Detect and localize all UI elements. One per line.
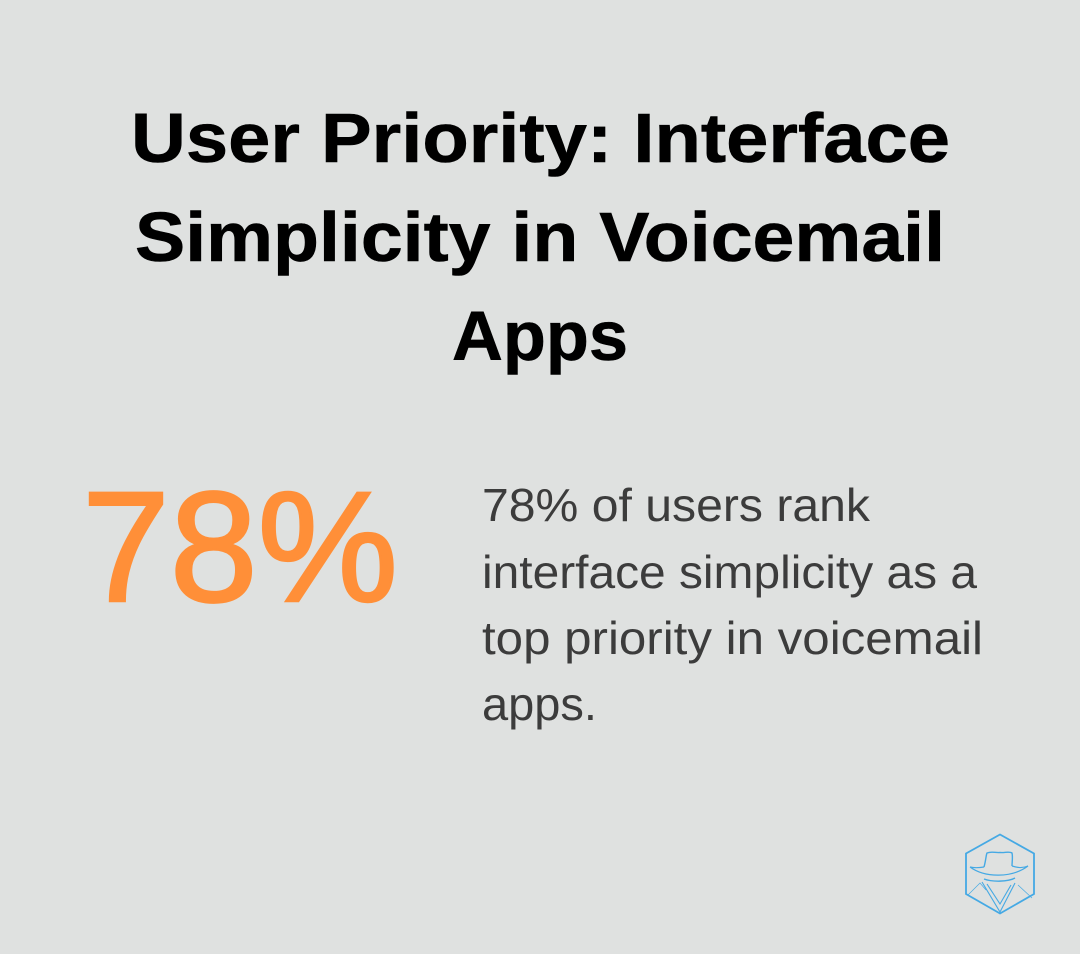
title: Simplicity in Voicemail — [135, 198, 945, 276]
statistic description: top priority in voicemail — [482, 612, 983, 664]
statistic description: interface simplicity as a — [482, 546, 977, 598]
statistic description: apps. — [482, 678, 597, 730]
statistic description: 78% of users rank — [482, 479, 871, 531]
title — [131, 99, 950, 375]
big statistic: 78%: 78% — [82, 460, 398, 635]
title: User Priority: Interface — [131, 99, 950, 177]
title: Apps — [452, 297, 628, 375]
icon: hexagon logo with spy hat — [966, 834, 1034, 914]
statistic description — [482, 479, 983, 730]
